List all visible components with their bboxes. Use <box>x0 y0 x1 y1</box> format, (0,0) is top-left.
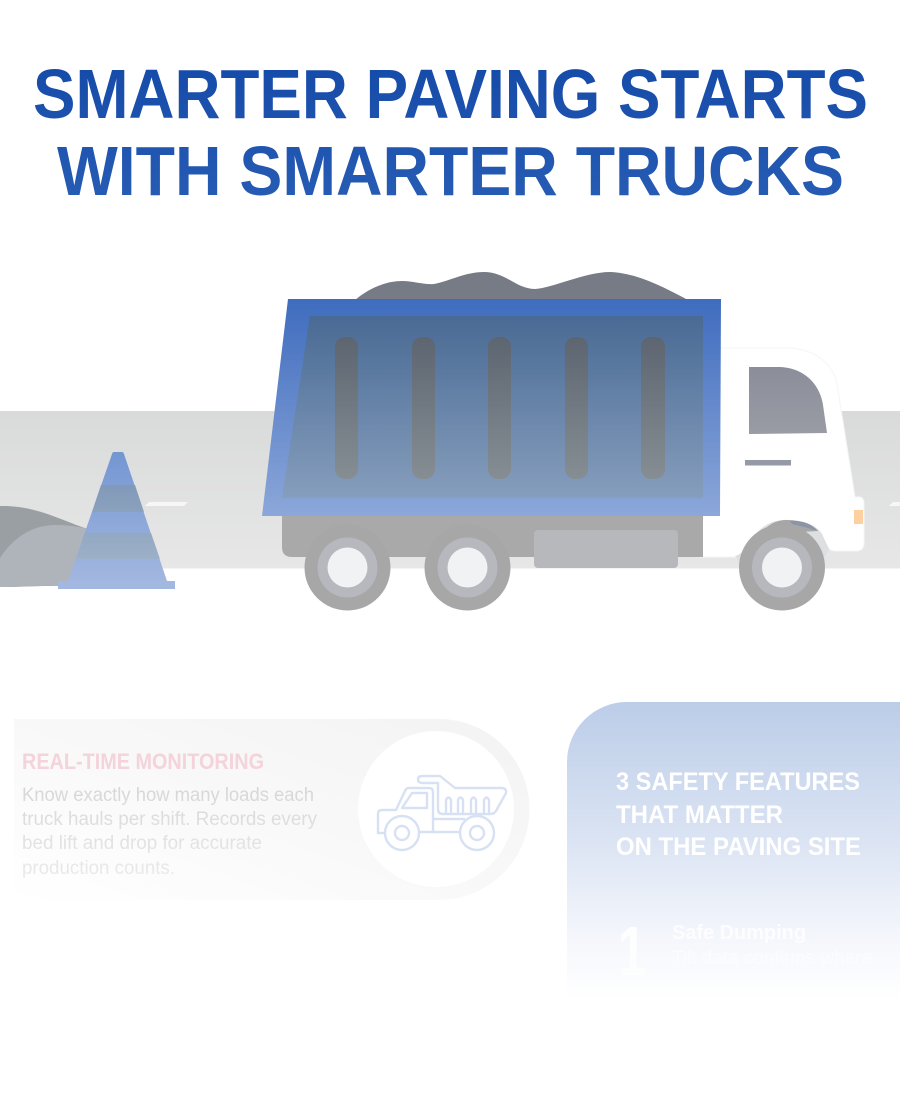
safety heading: ON THE PAVING SITE <box>616 833 861 861</box>
cab <box>700 348 864 562</box>
road <box>0 411 900 568</box>
icon: dump truck outline <box>378 776 506 850</box>
panel body text <box>22 785 317 879</box>
feature number: 1 <box>618 912 646 990</box>
panel: real-time monitoring <box>14 719 530 900</box>
door handle <box>745 460 791 466</box>
gravel pile <box>0 506 88 587</box>
safety heading: THAT MATTER <box>616 801 783 829</box>
chassis <box>282 510 703 557</box>
panel: safety features <box>567 702 900 1000</box>
feature text: and when it happened. <box>672 973 855 994</box>
panel body text: Know exactly how many loads each <box>22 785 314 806</box>
title <box>33 55 868 210</box>
icon circle <box>358 731 514 887</box>
panel body text: truck hauls per shift. Records every <box>22 809 317 830</box>
dump bed <box>262 299 721 516</box>
side box <box>534 530 678 568</box>
safety heading: 3 SAFETY FEATURES <box>616 768 860 796</box>
dump truck <box>262 272 864 610</box>
cab window <box>749 367 827 434</box>
safety heading <box>616 768 861 861</box>
panel body text: bed lift and drop for accurate <box>22 833 262 854</box>
feature text <box>672 922 872 994</box>
title: WITH SMARTER TRUCKS <box>57 132 844 210</box>
bed ribs <box>335 337 665 479</box>
panel heading: REAL-TIME MONITORING <box>22 749 264 774</box>
wheel arch <box>735 520 829 562</box>
headlight <box>854 510 863 524</box>
cargo load <box>355 272 688 300</box>
panel body text: production counts. <box>22 858 175 879</box>
feature text: Safe Dumping <box>672 922 806 944</box>
feature text: Tilt data confirms where <box>672 948 872 969</box>
traffic cone <box>58 452 175 589</box>
wheels <box>304 524 825 610</box>
